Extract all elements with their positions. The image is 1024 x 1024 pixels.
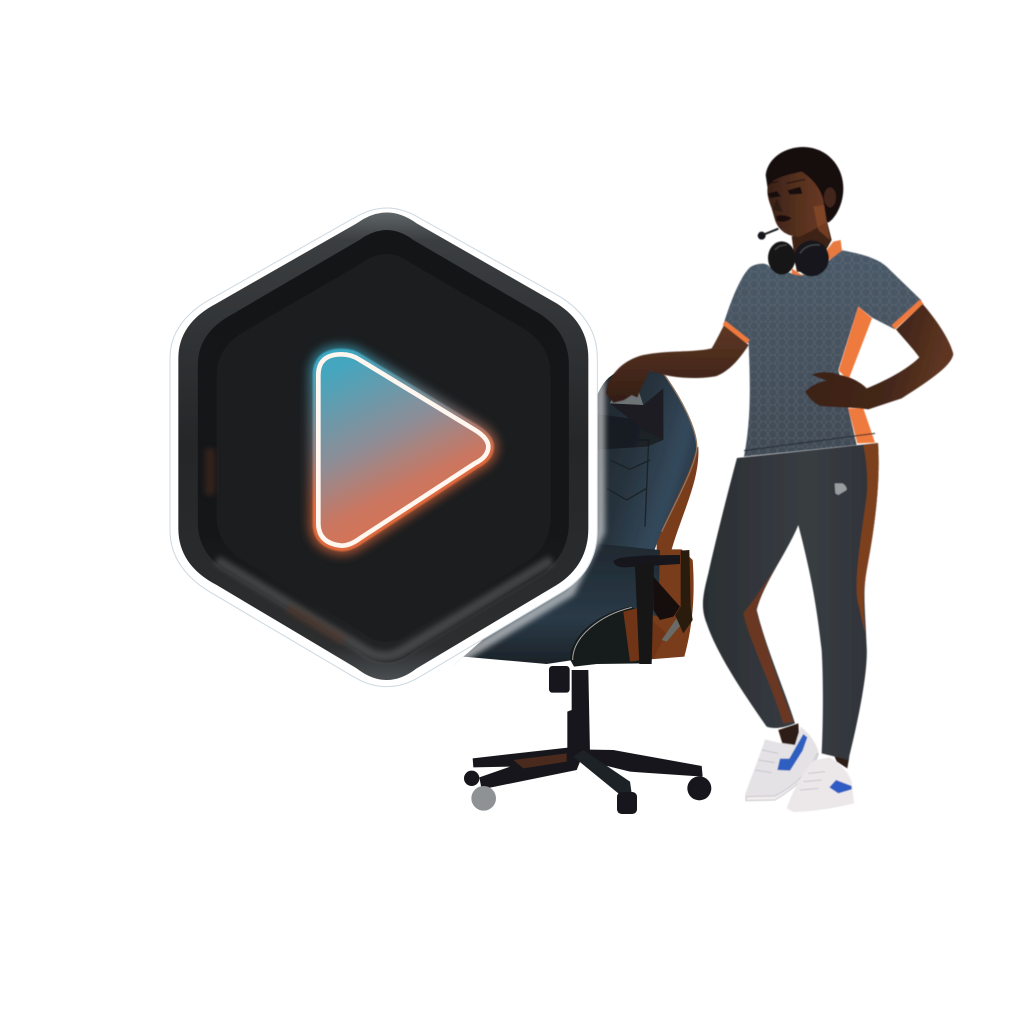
sneaker right laces [800, 772, 825, 790]
neon white outline [318, 354, 488, 546]
shirt upper side panel [839, 307, 872, 380]
badge outer bevel [178, 212, 588, 680]
sneaker left sole and laces [746, 750, 818, 801]
play triangle fill [318, 354, 488, 546]
gas lift column [567, 670, 590, 753]
mouth [776, 215, 792, 222]
caster left rear [464, 771, 479, 786]
backrest chevron quilting [607, 440, 650, 527]
lit lower bevel highlight [217, 560, 552, 656]
seat stitching [573, 607, 632, 660]
neon tube glow band [318, 354, 488, 546]
base leg right [577, 749, 703, 777]
caster left front [471, 786, 496, 811]
face [767, 172, 827, 237]
ankle left [778, 723, 800, 747]
woman standing [606, 147, 953, 812]
dark shoulder shadow [593, 413, 663, 450]
lower body [703, 443, 879, 812]
caster front [617, 792, 637, 814]
shirt [724, 250, 922, 457]
inner leg orange shading [743, 527, 797, 723]
chair seat [450, 543, 660, 668]
base leg front [573, 750, 632, 793]
right arm with hand on hip [805, 304, 953, 409]
shirt hem line [744, 433, 875, 451]
gaming chair [450, 369, 711, 814]
badge inner rim [198, 230, 569, 662]
trouser orange side stripe [857, 443, 879, 633]
trouser logo [835, 483, 847, 495]
neck [792, 220, 832, 273]
headrest pillow [610, 388, 663, 440]
sneaker right [787, 757, 854, 812]
sneaker left stripe [777, 734, 807, 771]
badge white sticker border [170, 208, 597, 687]
back of head hair [766, 147, 843, 223]
mic tip [758, 232, 766, 240]
eyes and brows [768, 179, 805, 197]
headphone left cup [768, 241, 795, 275]
ankle right [833, 753, 849, 768]
orange seat side [623, 608, 667, 662]
nose shadow [773, 198, 783, 212]
orange collar [792, 240, 842, 276]
right sleeve cuff [893, 302, 922, 327]
chair orange side bolster [632, 447, 698, 659]
seat tilt lever [549, 666, 570, 693]
mic boom [763, 229, 778, 235]
ear [824, 187, 836, 207]
white haze over chair next to badge [460, 355, 600, 658]
headset microphone [758, 229, 778, 240]
left arm resting on chair [606, 325, 749, 403]
armrest post [635, 563, 654, 664]
armrest rear bracket [675, 550, 693, 633]
left sleeve cuff [724, 323, 748, 342]
seat recline mechanism [662, 613, 685, 642]
orange bezel reflections [205, 448, 347, 645]
side bolster of seat [570, 607, 650, 667]
orange reflection on left leg [513, 753, 567, 768]
badge inner face [217, 254, 551, 642]
sneaker right stripe [829, 780, 852, 793]
cheek rim light [813, 205, 830, 240]
headrest emblem [610, 383, 643, 405]
sneaker left [745, 727, 818, 801]
dark lumbar opening [653, 577, 680, 620]
headphone right cup [794, 240, 829, 276]
upper body [606, 147, 953, 457]
armrest pad [613, 555, 680, 567]
chair backrest [593, 369, 697, 570]
shirt hexagon texture [724, 250, 922, 457]
backrest edge stitching [662, 373, 697, 532]
shirt lower side panel [848, 408, 875, 443]
hexagon play badge [170, 208, 600, 687]
caster right [687, 776, 711, 800]
base leg left [473, 747, 583, 789]
trousers [703, 443, 879, 760]
headphone highlights [775, 245, 820, 253]
soft neon halo [318, 354, 488, 546]
